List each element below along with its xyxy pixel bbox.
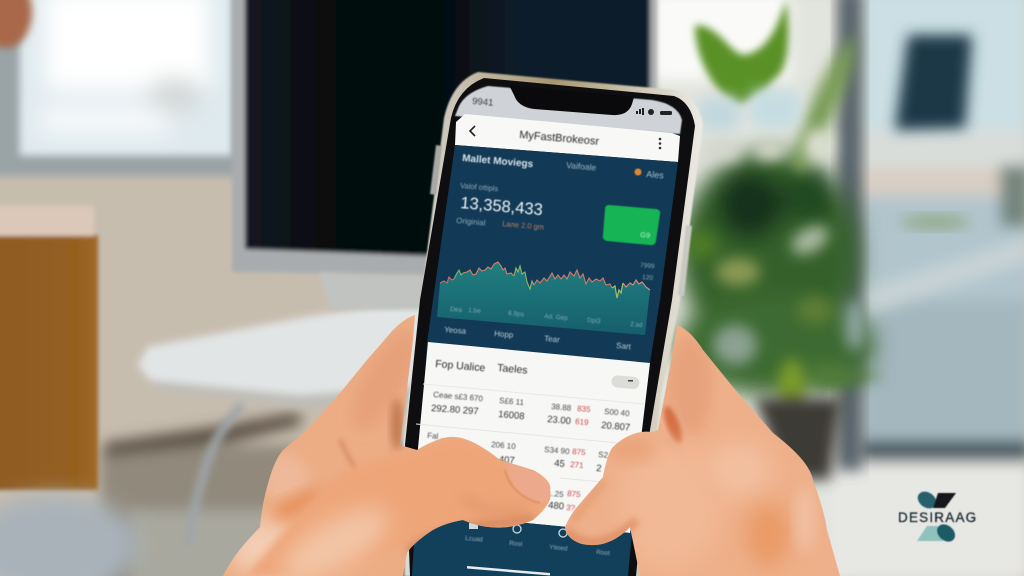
phone (403, 72, 703, 576)
table rows: 23.00 (547, 414, 571, 427)
table rows: Ceae s£3 670 (433, 390, 484, 403)
blurred green strip (900, 215, 970, 229)
upper leaf (695, 0, 788, 104)
table rows: 206 10 (491, 440, 517, 451)
chart axis labels: 120 (642, 274, 654, 282)
table rows: 271 (570, 460, 584, 470)
table rows: 292.80 297 (431, 403, 479, 417)
portfolio value (456, 181, 544, 232)
thumb (620, 443, 720, 567)
table rows: S£6 11 (499, 396, 525, 407)
table rows: 20.807 (601, 420, 631, 434)
skirting shadow (105, 412, 300, 456)
menu dots (659, 138, 661, 149)
green button: G9 (640, 230, 651, 240)
desk (138, 296, 440, 400)
phone frame (403, 72, 703, 576)
bottom navigation: Ytioed (549, 544, 568, 553)
bottom navigation (412, 513, 630, 576)
table rows: 835 (577, 404, 591, 414)
back chevron (470, 126, 475, 136)
right hand with thumb (565, 325, 840, 576)
screen (412, 85, 682, 576)
chart axis labels (450, 262, 655, 329)
right background panels (650, 0, 1024, 576)
navy screen body (412, 145, 678, 576)
market tabs (462, 153, 665, 181)
table rows: S2 (598, 450, 609, 460)
app title: MyFastBrokeosr (519, 129, 600, 148)
table rows: .407 (496, 454, 515, 467)
table rows: S00 40 (604, 407, 630, 418)
stem leaf (790, 35, 856, 175)
table rows: S34 90 (544, 445, 570, 456)
palm orange (746, 503, 790, 567)
time range tabs: Yeosa (444, 325, 467, 336)
table rows: 45 (554, 458, 565, 470)
dark monitor behind (895, 35, 972, 130)
desk leg (188, 405, 243, 545)
palm (228, 510, 291, 576)
chart axis labels: Dea (450, 306, 463, 314)
top values table panel (412, 342, 650, 533)
logo wordmark: DESIRAAG (898, 510, 977, 525)
chart axis labels: 7999 (640, 262, 655, 270)
toggle (611, 375, 640, 389)
table rows: 875 (572, 447, 586, 457)
left hand with thumb (215, 310, 560, 576)
table rows (427, 390, 631, 513)
leaf highlights (682, 90, 885, 411)
bottom navigation: Lcuad (465, 535, 483, 544)
index finger (357, 334, 414, 422)
wood cabinet (0, 206, 98, 490)
thumb nail (507, 463, 551, 503)
time range tabs (444, 325, 632, 351)
table heading: Fop Ualice (435, 358, 486, 374)
bottom navigation: Root (596, 549, 610, 557)
logo mark (915, 488, 958, 545)
table rows: 38.88 (551, 402, 572, 413)
logo: DESIRAAG (898, 488, 977, 545)
portfolio value: Lале 2.0 gm (502, 219, 544, 232)
table rows: 2 (596, 463, 602, 474)
table rows: 3? (566, 503, 576, 513)
finger shading (668, 335, 712, 435)
plant pot (755, 398, 842, 480)
status icons (636, 108, 672, 115)
portfolio value: 13,358,433 (460, 194, 543, 219)
window glass (20, 0, 232, 155)
chart axis labels: Ad. Gep (544, 313, 569, 322)
price chart (437, 262, 655, 335)
gap shadow between finger and thumb (662, 404, 684, 444)
time range tabs: Tear (544, 334, 560, 344)
app header (455, 114, 680, 162)
green button (603, 205, 660, 245)
table rows: 619 (575, 417, 589, 427)
floor (100, 445, 420, 576)
market tabs: Mallet Moviegs (462, 153, 534, 170)
portfolio value: Valof ottipls (460, 181, 499, 193)
bezel (405, 78, 695, 576)
status time: 9941 (472, 96, 494, 109)
table rows: 480 (548, 500, 564, 512)
chart axis labels: 6.9ps (508, 310, 525, 318)
side buttons (430, 145, 442, 195)
table rows: ..25 (550, 489, 564, 499)
column (838, 0, 862, 470)
notch (509, 85, 634, 115)
plant (675, 0, 885, 480)
chart axis labels: 2.sd (630, 321, 643, 329)
time range tabs: Sart (616, 341, 632, 351)
blurred foreground object left (0, 495, 140, 576)
brown corner top left (0, 0, 32, 48)
chart axis labels: 1.be (468, 307, 481, 315)
thumb (245, 437, 550, 576)
window frame top left (0, 0, 240, 176)
table rows: Fal .. (427, 431, 445, 442)
monitor (232, 0, 657, 310)
chart axis labels: Dpl3 (587, 317, 601, 325)
table rows: 875 (567, 489, 581, 499)
table heading (435, 358, 528, 377)
time range tabs: Hopp (494, 329, 514, 340)
market tabs: Vaifoale (566, 160, 597, 173)
table rows: 16008 (498, 409, 525, 422)
bottom navigation: Rost (509, 540, 523, 548)
table heading: Taeles (497, 362, 528, 377)
status bar (455, 86, 682, 134)
portfolio value: Originial (456, 216, 486, 228)
market tabs: Ales (646, 169, 665, 181)
